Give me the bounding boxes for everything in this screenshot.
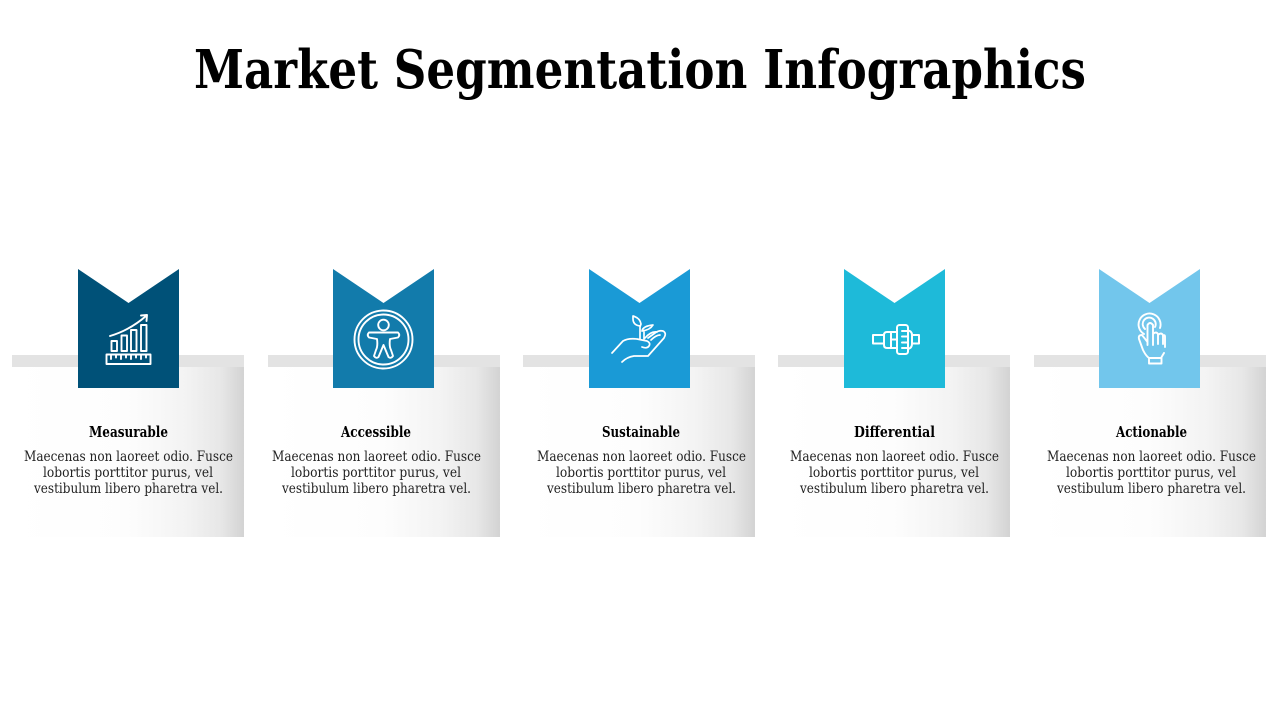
title: Market Segmentation Infographics (194, 39, 1086, 101)
body text: lobortis porttitor purus, vel (556, 465, 726, 481)
notched banner (1099, 269, 1200, 388)
notched banner (589, 269, 690, 388)
body text: vestibulum libero pharetra vel. (546, 481, 736, 497)
icon: hand holding seedling (612, 316, 665, 362)
body text (272, 449, 481, 497)
notched banner (333, 269, 434, 388)
body text: Maecenas non laoreet odio. Fusce (790, 449, 999, 465)
panel: actionable (1034, 269, 1266, 537)
card background (268, 355, 500, 537)
panel: differential (778, 269, 1010, 537)
icon: accessibility figure in circle (354, 310, 412, 368)
card background (778, 355, 1010, 537)
body text (1047, 449, 1256, 497)
panel: measurable (12, 269, 244, 537)
body text: Maecenas non laoreet odio. Fusce (272, 449, 481, 465)
body text: vestibulum libero pharetra vel. (33, 481, 223, 497)
card background (1034, 355, 1266, 537)
body text (537, 449, 746, 497)
panel: accessible (268, 269, 500, 537)
body text: vestibulum libero pharetra vel. (281, 481, 471, 497)
panel: sustainable (523, 269, 755, 537)
body text: Maecenas non laoreet odio. Fusce (537, 449, 746, 465)
body text: vestibulum libero pharetra vel. (799, 481, 989, 497)
icon: finger tapping (1139, 314, 1165, 364)
heading: Sustainable (602, 423, 680, 441)
card background (523, 355, 755, 537)
body text: vestibulum libero pharetra vel. (1056, 481, 1246, 497)
heading: Actionable (1115, 423, 1187, 441)
notched banner (844, 269, 945, 388)
notched banner (78, 269, 179, 388)
body text: Maecenas non laoreet odio. Fusce (1047, 449, 1256, 465)
body text: lobortis porttitor purus, vel (291, 465, 461, 481)
body text: Maecenas non laoreet odio. Fusce (24, 449, 233, 465)
icon: bar chart on ruler (106, 315, 150, 364)
body text (790, 449, 999, 497)
heading: Accessible (340, 423, 411, 441)
body text (24, 449, 233, 497)
heading: Differential (854, 423, 935, 441)
body text: lobortis porttitor purus, vel (1066, 465, 1236, 481)
heading: Measurable (89, 423, 168, 441)
card background (12, 355, 244, 537)
icon: coupling connector (873, 325, 919, 354)
body text: lobortis porttitor purus, vel (43, 465, 213, 481)
body text: lobortis porttitor purus, vel (809, 465, 979, 481)
